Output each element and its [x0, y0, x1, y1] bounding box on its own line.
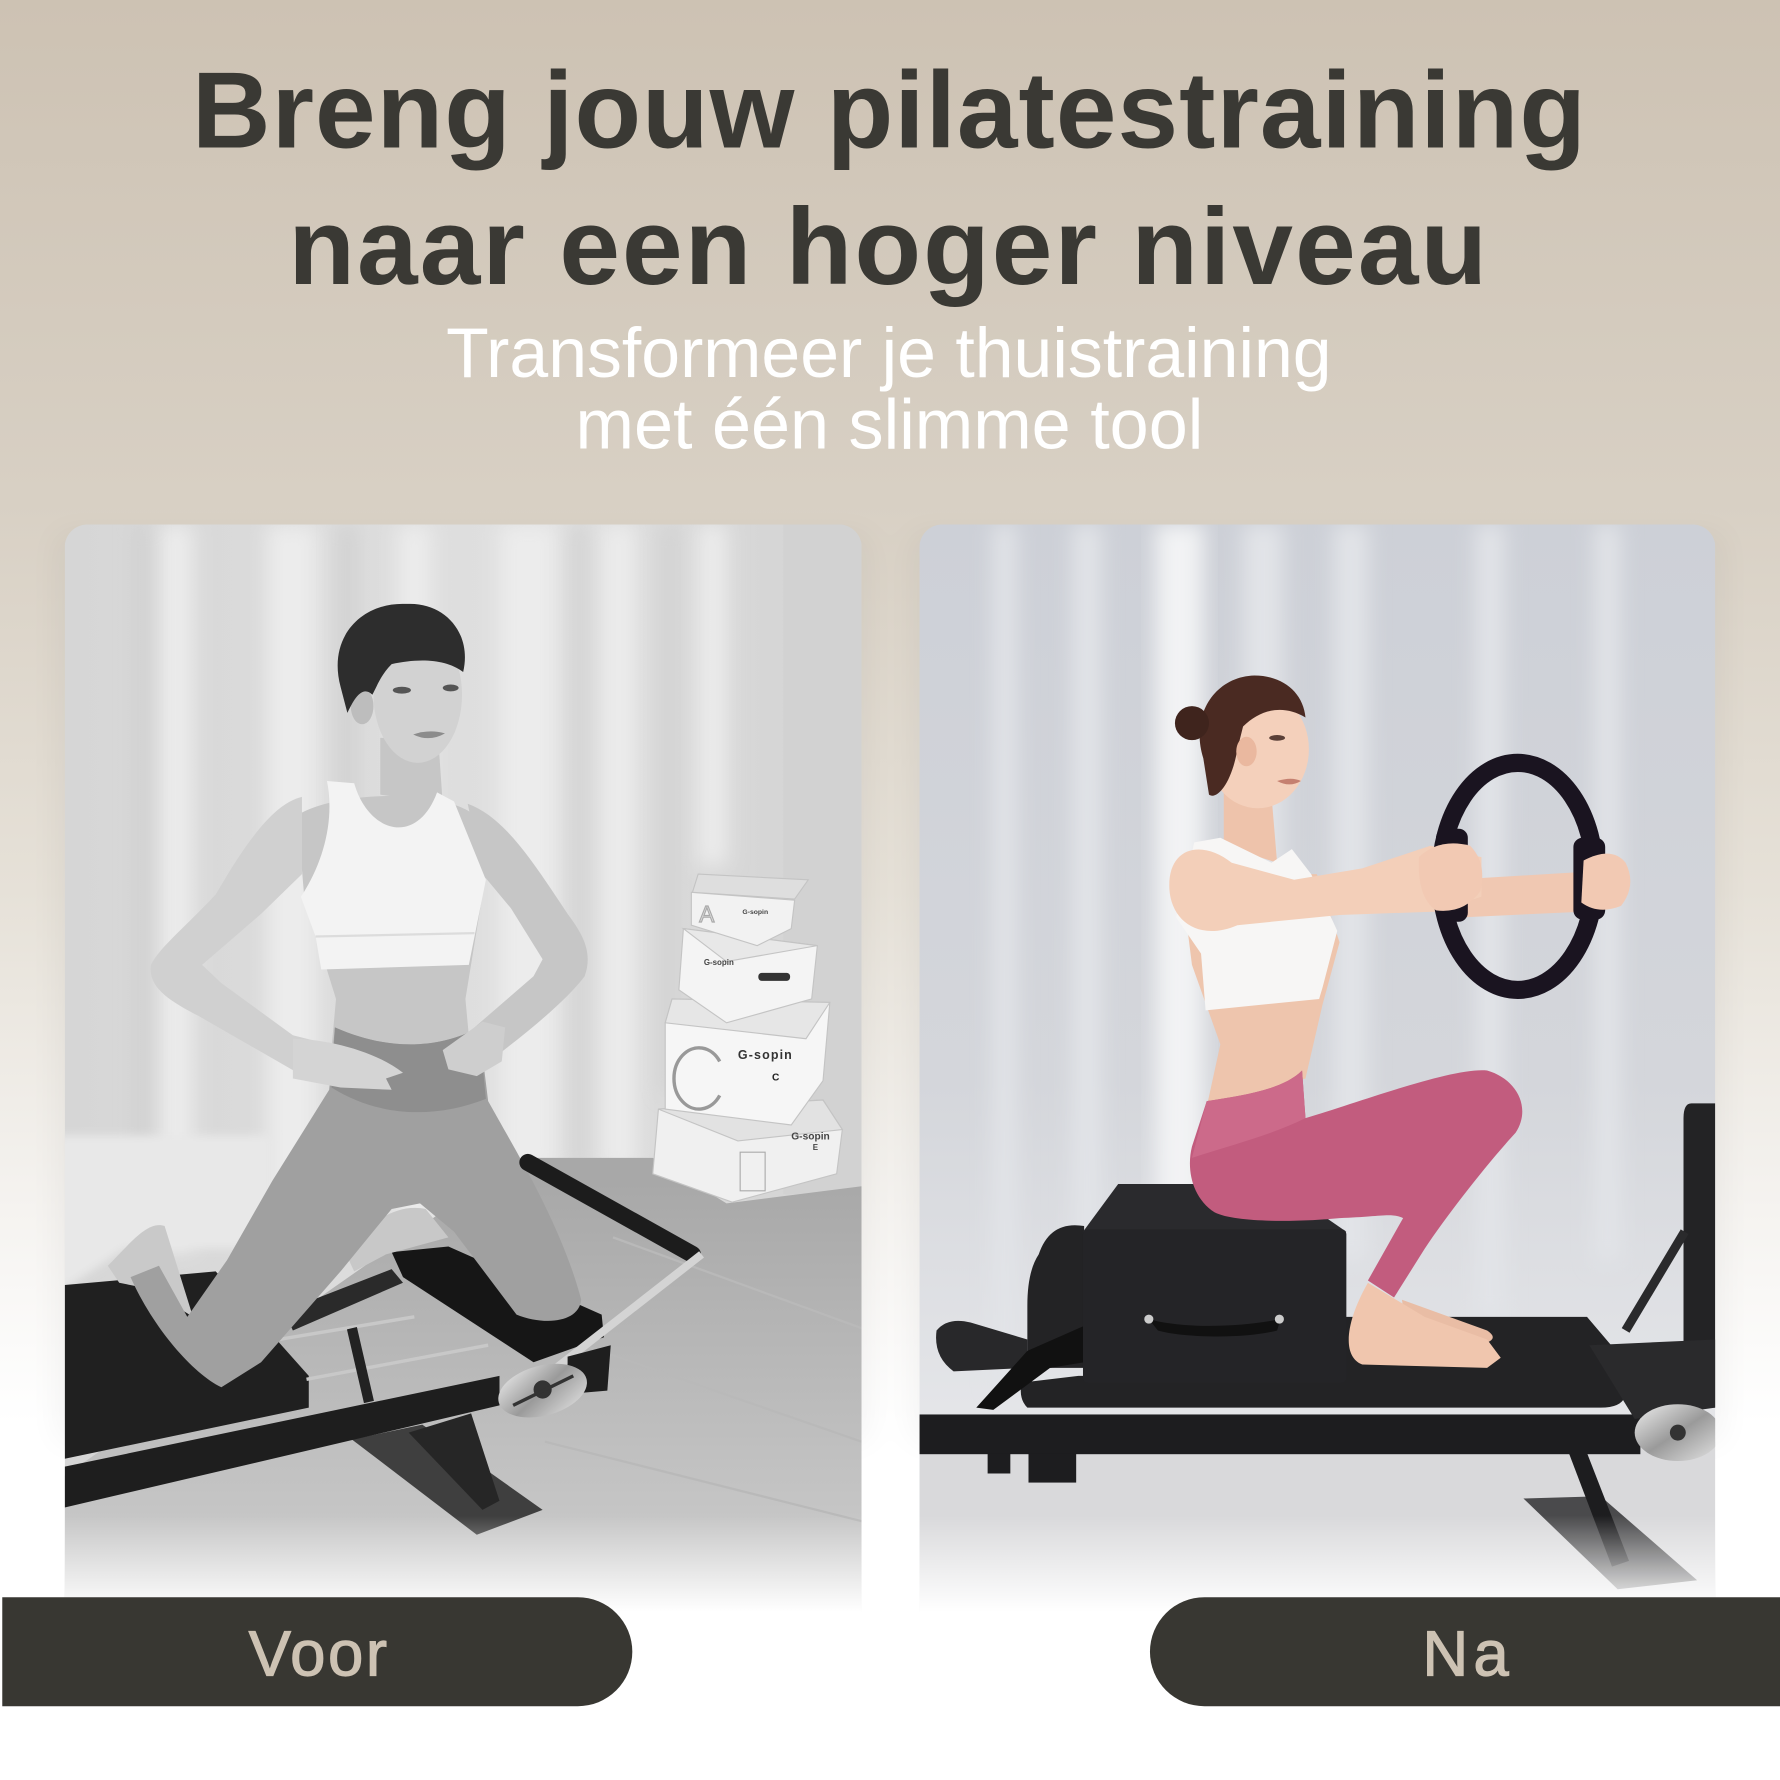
subtitle: met één slimme tool [576, 384, 1203, 463]
far leg block [1028, 1453, 1076, 1483]
bottom fade [65, 1515, 862, 1629]
near foot block [988, 1453, 1010, 1473]
roller [528, 1162, 692, 1254]
strut [352, 1328, 369, 1402]
torso [1181, 874, 1340, 1107]
pill label: Voor [249, 1619, 387, 1690]
floor boards [613, 1236, 862, 1522]
hair [338, 604, 465, 713]
bottom fade [920, 1515, 1715, 1629]
sports bra [1176, 838, 1337, 1010]
foot rest pad [936, 1321, 1027, 1371]
far foot [1402, 1300, 1493, 1344]
bare feet [1349, 1283, 1501, 1368]
resistance rods [278, 1317, 488, 1379]
metal arm [556, 1254, 702, 1368]
panel: voor photo [57, 524, 862, 1629]
fists [1419, 843, 1630, 911]
bra band [316, 933, 475, 937]
title [192, 50, 1586, 308]
near arm [1169, 846, 1481, 931]
strap [976, 1326, 1084, 1410]
end panel [1684, 1103, 1715, 1408]
box top [1083, 1184, 1346, 1232]
leggings [1190, 1070, 1522, 1298]
ring [1441, 763, 1595, 990]
box E [653, 1100, 842, 1202]
sitting box [1083, 1184, 1346, 1383]
leggings [131, 1027, 581, 1387]
torso [302, 796, 486, 1044]
push-through bar and pulley [492, 1162, 702, 1427]
sports bra [301, 781, 486, 969]
ring pads [1436, 829, 1605, 922]
box C: G-sopin [738, 1048, 793, 1062]
curtain backdrop [65, 524, 862, 1466]
subtitle [446, 313, 1332, 463]
head [1207, 690, 1309, 808]
end block [568, 1345, 611, 1394]
box front [1083, 1229, 1346, 1383]
storage boxes [653, 874, 842, 1202]
box A [691, 874, 808, 946]
box handle [1144, 1315, 1284, 1336]
woman voor [108, 604, 588, 1387]
box A: A [699, 901, 715, 927]
box E: E [813, 1143, 818, 1152]
box B: G-sopin [704, 958, 734, 967]
rail [920, 1414, 1640, 1454]
carriage end [1589, 1340, 1715, 1419]
reformer frame [65, 1246, 604, 1510]
back cushion [1027, 1225, 1084, 1368]
neck [380, 738, 443, 804]
woman na [1169, 675, 1630, 1368]
rear foot [108, 1225, 193, 1317]
box A: G-sopin [742, 909, 768, 916]
box C: C [772, 1073, 780, 1084]
facial features [393, 685, 459, 738]
pill shape [2, 1597, 632, 1706]
hands [293, 1039, 403, 1090]
title: Breng jouw pilatestraining [192, 50, 1586, 172]
head [374, 660, 462, 763]
floor mat [1523, 1496, 1697, 1589]
panel: na photo [920, 524, 1721, 1629]
box C [665, 999, 830, 1125]
ear [1236, 737, 1257, 766]
far rail [284, 1269, 403, 1330]
pill shape [1150, 1597, 1780, 1706]
box B [679, 929, 817, 1023]
gear plate [1635, 1404, 1721, 1461]
subtitle: Transformeer je thuistraining [446, 313, 1332, 392]
far arm [1453, 872, 1585, 917]
right arm [468, 804, 588, 1053]
reformer frame [920, 1103, 1721, 1567]
left arm [152, 797, 311, 1070]
waistband [1192, 1070, 1305, 1158]
floor mat [352, 1425, 543, 1535]
folding leg [409, 1413, 499, 1510]
curtain hem [65, 1134, 262, 1285]
facial features [1269, 735, 1301, 784]
pill label: Na [1422, 1619, 1509, 1690]
pill: voor [2, 1597, 632, 1706]
hair bun [1175, 706, 1209, 740]
bench pad [65, 1271, 309, 1459]
box E: G-sopin [791, 1132, 830, 1143]
panel shadows [57, 534, 1723, 1442]
ear [351, 688, 373, 724]
waistband [331, 1027, 486, 1112]
shoulder pad [392, 1246, 604, 1362]
floor [65, 1158, 862, 1623]
strut [1626, 1232, 1685, 1330]
title: naar een hoger niveau [288, 186, 1487, 308]
pad [1021, 1317, 1626, 1408]
neck [1224, 789, 1277, 863]
hair [1200, 675, 1305, 796]
gear plate [492, 1355, 593, 1427]
far foot [346, 1208, 448, 1271]
side rail [65, 1376, 499, 1508]
curtain backdrop [920, 524, 1715, 1623]
floor [920, 1442, 1715, 1623]
folding leg [1569, 1453, 1629, 1567]
pill: na [1150, 1597, 1780, 1706]
